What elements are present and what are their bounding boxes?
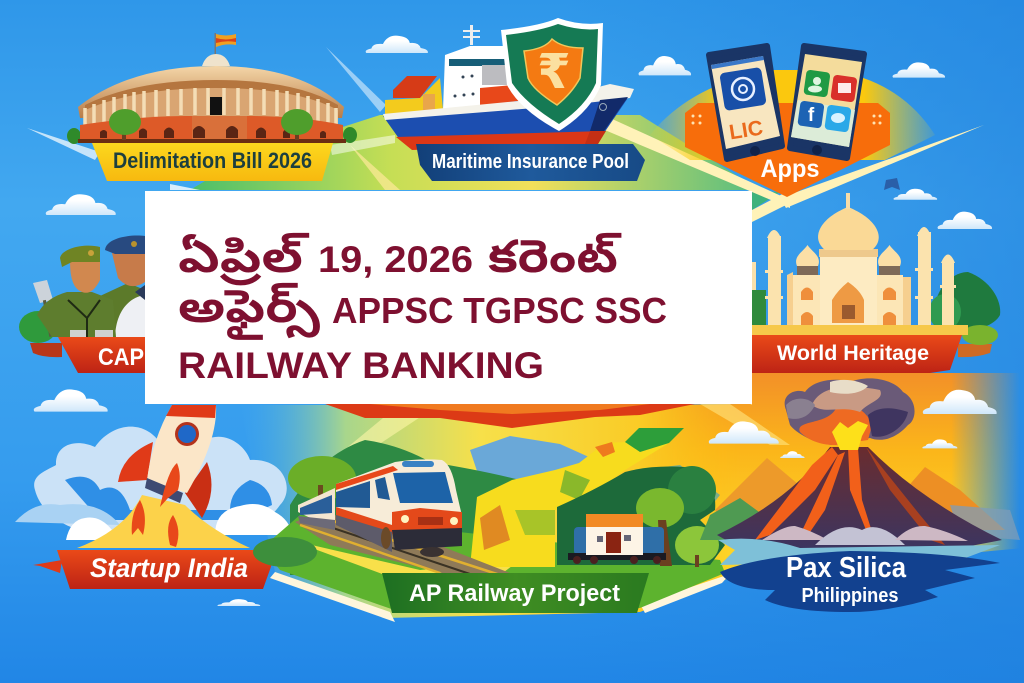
decorative dots: [692, 114, 882, 124]
soldier right: [100, 236, 145, 337]
eruption smoke: [785, 378, 915, 450]
clouds: [34, 36, 997, 606]
lava streams: [755, 447, 945, 545]
title text: ఏప్రిల్: [178, 231, 309, 286]
soldier left: [37, 246, 116, 337]
icon: Taj Mahal: [745, 193, 1000, 357]
phone: social apps: f: [808, 105, 815, 126]
title text: 19, 2026: [318, 239, 473, 280]
banner: World Heritage: World Heritage: [777, 342, 929, 365]
light rays: [27, 47, 984, 622]
icon: soldiers: [19, 236, 145, 357]
train: [298, 459, 462, 557]
truck and house: [568, 514, 666, 564]
central landscape behind panel: [190, 115, 1024, 618]
icon: volcano: [700, 378, 1020, 565]
smoke clouds: [15, 427, 292, 540]
title text: [178, 231, 667, 386]
minarets: [765, 227, 956, 326]
rail track: [295, 512, 515, 575]
title text: APPSC TGPSC SSC: [332, 290, 667, 331]
rupee symbol: ₹: [537, 44, 571, 100]
icon: red chevron under panel: [325, 404, 695, 428]
ash clouds: [762, 526, 968, 545]
icon: rupee shield: [501, 18, 603, 131]
title panel: [145, 191, 752, 404]
banner: CAPF (partly hidden): [58, 337, 145, 373]
title text: అఫైర్స్: [178, 281, 321, 340]
banner: AP Railway Project: AP Railway Project: [409, 580, 620, 607]
icon: cargo ship: [383, 25, 634, 150]
rocket body: [147, 405, 216, 493]
banner: Delimitation Bill 2026: Delimitation Bill 2026: [113, 148, 312, 173]
orange sky behind volcano: [660, 373, 1017, 584]
AP railway scene: [253, 428, 725, 612]
icon: apps panel: [650, 46, 935, 197]
phone: LIC: [709, 46, 782, 159]
banner: CAPF (partly hidden): CAP: [98, 344, 144, 371]
plant pot: [958, 325, 998, 357]
ground: [262, 515, 725, 612]
banner: Pax Silica Philippines: Pax Silica: [786, 552, 907, 584]
banner: Pax Silica Philippines: Philippines: [802, 585, 898, 607]
banner: Maritime Insurance Pool: [416, 144, 645, 181]
hills: [290, 436, 720, 575]
flag: [214, 33, 236, 57]
Apps label: Apps: [760, 155, 820, 183]
banner: AP Railway Project: [382, 573, 649, 613]
ship superstructure: [443, 25, 512, 110]
forest: [557, 467, 725, 565]
banner: Startup India: [33, 550, 277, 589]
LIC text: LIC: [728, 116, 765, 144]
phone: social apps: [790, 46, 864, 158]
banner: World Heritage: [752, 325, 968, 373]
map of Andhra Pradesh: [470, 428, 684, 567]
banner: Startup India: Startup India: [90, 553, 248, 583]
rocket fins: [118, 442, 211, 518]
bush and pot: [19, 280, 62, 357]
mountains: [700, 458, 1020, 540]
banner: Pax Silica Philippines: [720, 551, 1000, 612]
title text: RAILWAY BANKING: [178, 345, 544, 386]
banner: Maritime Insurance Pool: Maritime Insurance Pool: [432, 151, 629, 173]
icon: parliament building: [67, 33, 357, 144]
title text: కరెంట్: [488, 231, 622, 282]
water: [718, 539, 1000, 565]
icon: rocket launch: [15, 405, 292, 548]
tree: [253, 456, 356, 567]
trees: [636, 466, 719, 567]
banner: Delimitation Bill 2026: [92, 143, 333, 181]
volcano body: [717, 447, 1002, 548]
